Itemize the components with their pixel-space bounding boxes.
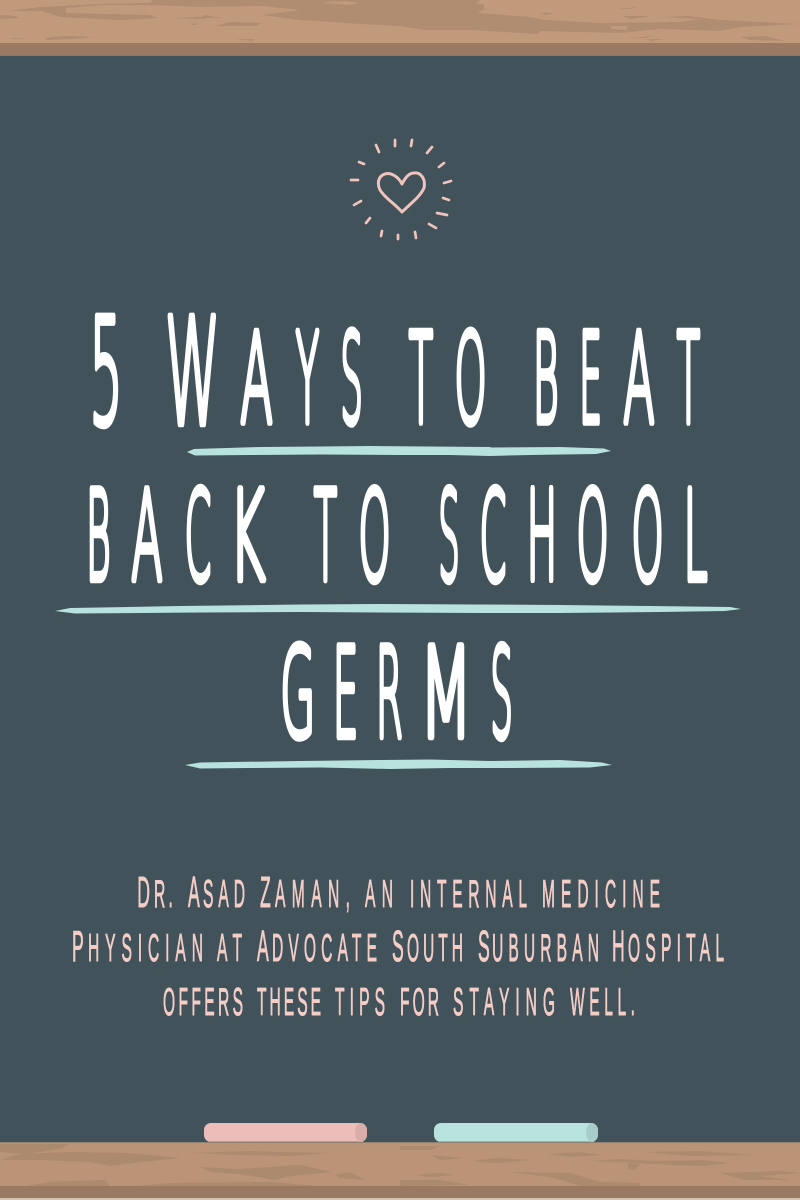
intro line 1: AMAN, [275, 873, 350, 916]
icon: rays [351, 140, 451, 239]
title: S [490, 622, 513, 766]
intro line 1: MEDICINE [542, 873, 660, 916]
title line 2: T [314, 466, 337, 610]
intro line 2: S [392, 923, 404, 972]
intro line 1: A [188, 869, 200, 918]
title line 2: S [439, 466, 460, 610]
title line 2: H [527, 466, 557, 610]
title line 2: C [480, 466, 506, 610]
intro line 1: D [137, 869, 150, 918]
intro line 3: FOR [400, 981, 439, 1024]
chalk end cap [586, 1123, 598, 1142]
title line 1: S [340, 308, 363, 452]
chalk underlines [55, 446, 741, 769]
intro line 2: HYSICIAN [88, 927, 203, 970]
title line 1: A [240, 308, 273, 452]
intro line 2: S [478, 923, 490, 972]
title line 2: O [631, 466, 664, 610]
intro line 3: OFFERS [163, 981, 243, 1024]
intro line 1: AN [365, 873, 393, 916]
text: T [677, 308, 700, 452]
intro line 2: AT [217, 927, 242, 970]
intro line 3: THESE [257, 981, 321, 1024]
intro line 3: STAYING [453, 981, 555, 1024]
text: L [683, 466, 708, 610]
intro line 2: UBURBAN [492, 927, 599, 970]
top wooden frame [0, 0, 800, 56]
title [86, 288, 708, 766]
intro line 2: P [72, 923, 84, 972]
title line 2: B [86, 466, 111, 610]
underline 1 [187, 446, 611, 456]
intro line 2: A [257, 923, 269, 972]
title line 3: G [280, 622, 315, 766]
title line 2: O [576, 466, 609, 610]
intro line 1: INTERNAL [410, 873, 527, 916]
title line 2: K [229, 466, 265, 610]
title line 2: O [358, 466, 391, 610]
teal chalk [434, 1123, 598, 1142]
title line 1: 5 [90, 288, 123, 458]
underline 2 [55, 604, 741, 614]
icon: heart outline [378, 173, 424, 212]
pink chalk [204, 1123, 367, 1142]
intro text [72, 869, 724, 1024]
intro line 3: TIPS [335, 981, 385, 1024]
intro line 2: OUTH [407, 927, 463, 970]
chalk end cap [355, 1123, 367, 1142]
title line 1: Y [296, 308, 319, 452]
title line 1: E [579, 308, 602, 452]
intro line 2: OSPITAL [628, 927, 724, 970]
title line 1: W [165, 288, 220, 458]
intro line 2: DVOCATE [272, 927, 377, 970]
title line 1: T [409, 308, 433, 452]
title line 3: E [333, 622, 358, 766]
underline 3 [185, 760, 612, 769]
intro line 1: R. [154, 873, 173, 916]
title line 1: B [533, 308, 559, 452]
intro line 1: Z [260, 869, 271, 918]
title line 2: A [131, 466, 163, 610]
intro line 1: SAD [203, 873, 245, 916]
title line 1: O [454, 308, 487, 452]
title line 1: A [623, 308, 655, 452]
title line 3: R [376, 622, 403, 766]
intro line 2: H [612, 923, 625, 972]
title line 3: M [420, 622, 472, 766]
icon: heart with rays [351, 140, 451, 239]
title line 2: C [185, 466, 211, 610]
intro line 3: WELL. [570, 981, 635, 1024]
bottom wooden ledge [0, 1142, 800, 1200]
